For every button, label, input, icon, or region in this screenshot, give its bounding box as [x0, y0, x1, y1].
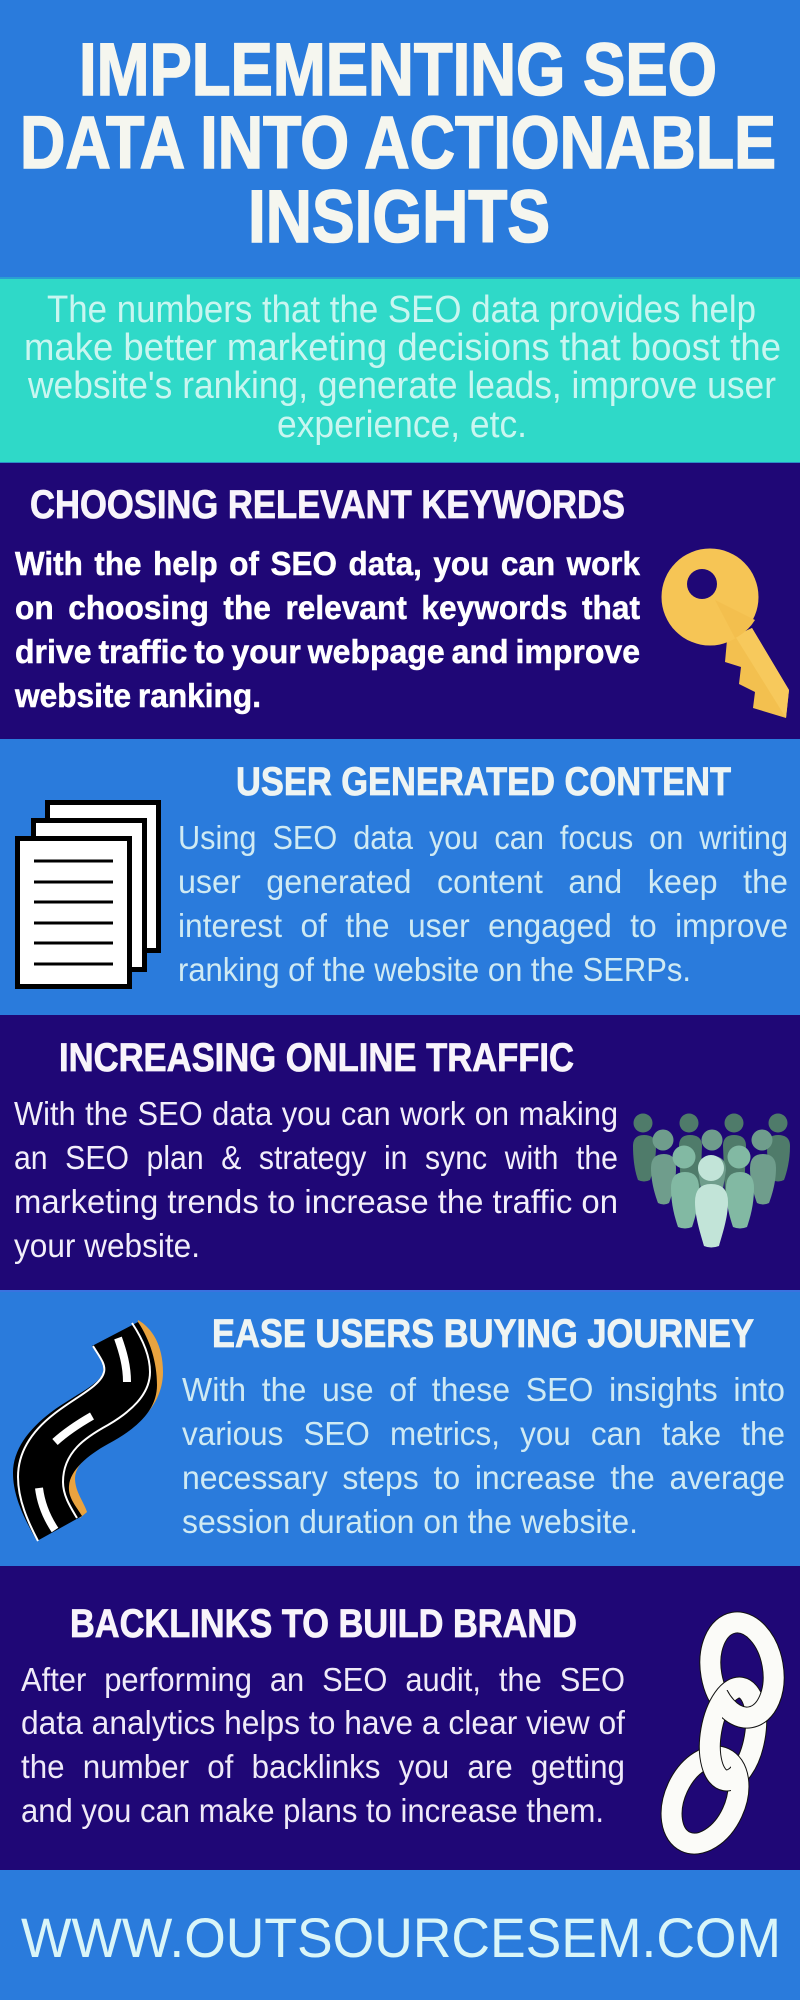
title heading — [20, 28, 776, 258]
body text: keywords: website ranking. — [14, 677, 261, 714]
body text: user generated content — [178, 819, 788, 988]
body text: user generated content: user generated content and keep the — [178, 863, 788, 900]
panel: title — [0, 0, 800, 277]
panel: introduction — [0, 277, 800, 464]
heading: choosing relevant keywords: CHOOSING RELEVANT KEYWORDS — [30, 483, 625, 527]
panel: backlinks to build brand — [0, 1566, 800, 1870]
body text: online traffic: an SEO plan & strategy in sync with the — [14, 1139, 618, 1176]
title heading: INSIGHTS — [248, 175, 550, 258]
icon: crowd of people — [633, 1114, 790, 1248]
body text: user generated content: ranking of the website on the SERPs. — [178, 951, 691, 988]
intro text: experience, etc. — [277, 404, 527, 446]
body text: keywords — [14, 545, 641, 714]
body text: buying journey: various SEO metrics, you can take the — [182, 1415, 785, 1452]
body text: backlinks: After performing an SEO audit, the SEO — [21, 1661, 625, 1698]
intro text: make better marketing decisions that boost the — [24, 327, 781, 369]
panel: ease users buying journey — [0, 1290, 800, 1566]
body text: online traffic: With the SEO data you can work on making — [14, 1095, 618, 1132]
body text: user generated content: interest of the user engaged to improve — [178, 907, 788, 944]
panel: user generated content — [0, 739, 800, 1015]
body text: online traffic: your website. — [14, 1227, 200, 1264]
body text: buying journey: session duration on the website. — [182, 1503, 638, 1540]
body text: keywords: on choosing the relevant keywords that — [15, 589, 640, 626]
heading: backlinks to build brand: BACKLINKS TO BUILD BRAND — [70, 1602, 577, 1646]
icon: key — [662, 548, 789, 718]
panel: footer — [0, 1870, 800, 2000]
body text: buying journey — [182, 1371, 785, 1540]
body text: buying journey: With the use of these SEO insights into — [182, 1371, 785, 1408]
panel: increasing online traffic — [0, 1015, 800, 1290]
icon: stacked documents — [18, 802, 158, 986]
body text: backlinks: data analytics helps to have a clear view of — [21, 1704, 626, 1741]
footer website address: WWW.OUTSOURCESEM.COM — [21, 1906, 781, 1969]
heading: increasing online traffic: INCREASING ONLINE TRAFFIC — [59, 1036, 574, 1080]
body text: online traffic — [14, 1095, 618, 1264]
intro text: The numbers that the SEO data provides help — [47, 289, 756, 331]
body text: backlinks: and you can make plans to increase them. — [21, 1792, 604, 1829]
intro text — [24, 289, 781, 446]
body text: buying journey: necessary steps to increase the average — [182, 1459, 785, 1496]
body text: keywords: With the help of SEO data, you can work — [15, 545, 641, 582]
heading: user generated content: USER GENERATED CONTENT — [236, 760, 731, 804]
body text: backlinks — [21, 1661, 626, 1829]
icon: chain links — [658, 1617, 781, 1854]
body text: backlinks: the number of backlinks you are getting — [21, 1748, 625, 1785]
body text: keywords: drive traffic to your webpage and improve — [15, 633, 640, 670]
body text: online traffic: marketing trends to increase the traffic on — [14, 1183, 618, 1220]
panel: choosing relevant keywords — [0, 463, 800, 739]
icon: winding road — [13, 1320, 163, 1541]
